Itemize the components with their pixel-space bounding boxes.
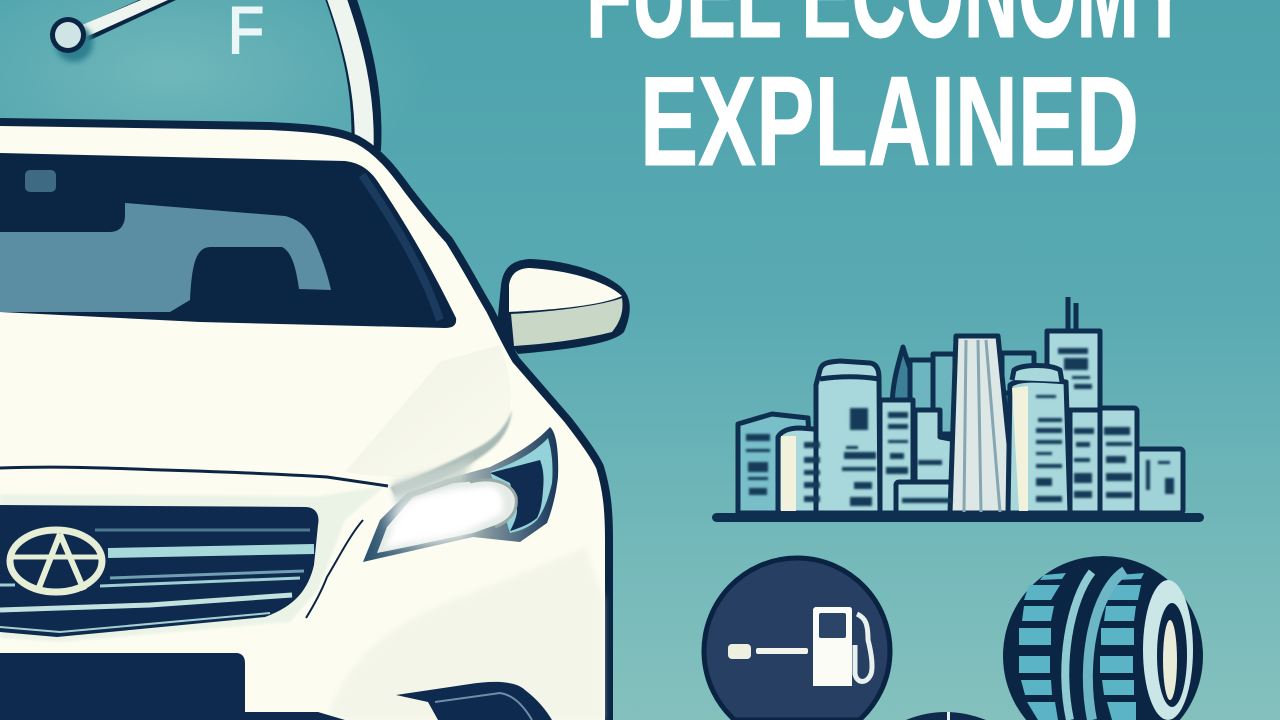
gauge needle [50, 0, 176, 62]
icon: fuel pump [704, 558, 890, 720]
left cream face [781, 436, 796, 511]
back buildings [892, 297, 1076, 434]
car [0, 122, 630, 720]
left cream building [778, 428, 826, 513]
pump nozzle line [756, 648, 808, 654]
pump hose [855, 614, 872, 682]
icon: tire [1003, 556, 1203, 720]
stepped building [915, 410, 956, 513]
side mirror [497, 259, 630, 354]
grille [0, 505, 318, 637]
center-left building [880, 400, 913, 513]
headlight [363, 427, 558, 562]
grille surround [0, 486, 385, 642]
tire body [1003, 556, 1203, 720]
title [586, 0, 1189, 192]
logo emblem [10, 530, 102, 592]
license plate [0, 653, 345, 720]
pump badge [704, 558, 890, 720]
right cream face [1012, 386, 1028, 511]
city skyline icon [738, 297, 1183, 513]
headlight inner dark [490, 460, 544, 531]
tall rounded building [816, 361, 880, 513]
windshield [0, 153, 456, 328]
pump nozzle [728, 644, 751, 659]
headlight teal accent [490, 438, 553, 533]
gauge arc [337, 0, 366, 150]
right buildings [1070, 410, 1100, 513]
right cap [1012, 366, 1062, 382]
right cream building [1008, 380, 1070, 513]
rear-view mirror mount [25, 170, 56, 192]
hood crease lines [0, 410, 512, 618]
background glow behind gauge [0, 0, 430, 200]
fuel gauge [50, 0, 366, 150]
tire sidewall [1143, 580, 1193, 720]
headlight casing [363, 427, 558, 562]
grille stripes [0, 530, 314, 632]
windows [746, 348, 1174, 506]
car outline [0, 122, 609, 720]
hood fold shading [345, 345, 511, 477]
car body [0, 122, 609, 720]
rounded building cap line [820, 377, 879, 379]
tread grooves [1065, 571, 1125, 720]
headlight lens [377, 480, 515, 553]
headlight ring [470, 480, 516, 527]
tread blocks [1019, 573, 1144, 720]
skyline ground [712, 513, 1204, 522]
windshield interior [0, 203, 331, 312]
low bus block [896, 482, 956, 513]
upper right tower [1047, 331, 1100, 421]
fog lamp [396, 682, 552, 720]
central tower [950, 336, 1016, 513]
headlight glow [385, 486, 503, 548]
far left building [738, 414, 812, 513]
pump body [813, 607, 852, 686]
lower bumper shading [327, 548, 604, 720]
pump screen [819, 613, 846, 638]
icon: bottom badge [906, 712, 986, 720]
